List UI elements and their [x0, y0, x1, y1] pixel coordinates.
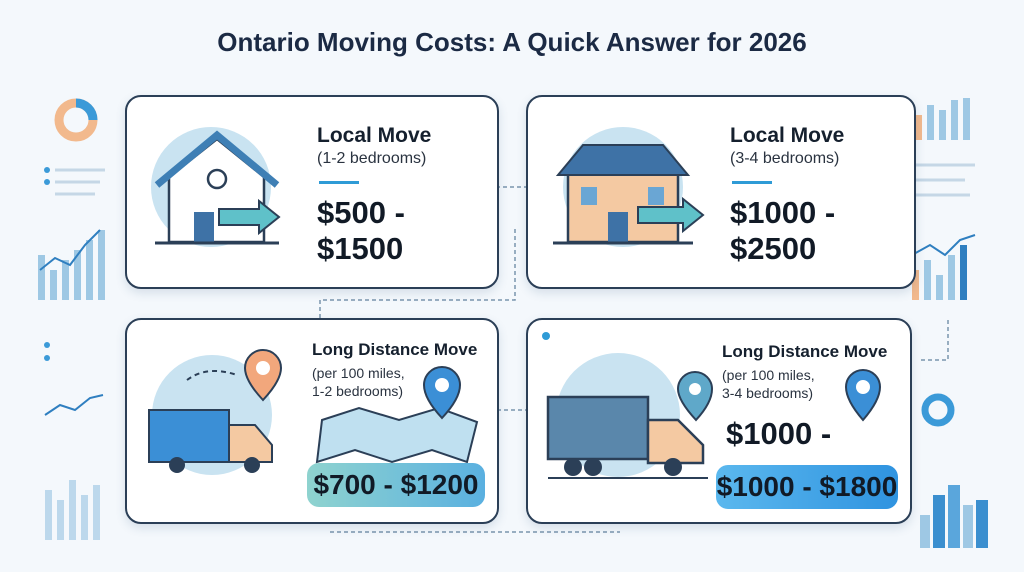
price pill — [716, 465, 898, 509]
price: $1000 - — [730, 195, 835, 230]
panel: long distance 1-2 bedrooms: Long Distance Move — [312, 340, 477, 359]
panel: long distance 3-4 bedrooms: 3-4 bedrooms) — [722, 385, 813, 401]
price pill: $700 - $1200 — [313, 469, 479, 500]
panel: long distance 1-2 bedrooms: (per 100 miles, — [312, 365, 405, 381]
price — [730, 195, 835, 266]
text: heading: Local Move — [317, 124, 431, 147]
icon: large truck — [546, 353, 713, 479]
icon: house — [151, 127, 280, 247]
panel: long distance 1-2 bedrooms — [125, 318, 499, 524]
panel: long distance 3-4 bedrooms — [526, 318, 912, 524]
price — [317, 195, 405, 266]
panel: local move 3-4 bedrooms — [526, 95, 916, 289]
panel: local move 3-4 bedrooms: (3-4 bedrooms) — [730, 150, 839, 167]
panel: local move 1-2 bedrooms — [125, 95, 499, 289]
panel: long distance 3-4 bedrooms: Long Distance Move — [722, 342, 887, 361]
price: $1000 - — [726, 416, 831, 451]
panel: local move 3-4 bedrooms: Local Move — [730, 124, 844, 147]
icon: truck and map — [148, 349, 478, 475]
price: $2500 — [730, 231, 816, 266]
title: Ontario Moving Costs: A Quick Answer for 2026 — [217, 27, 807, 57]
icon: pin — [845, 369, 881, 422]
panel: long distance 1-2 bedrooms: 1-2 bedrooms) — [312, 383, 403, 399]
panel: long distance 3-4 bedrooms: (per 100 miles, — [722, 367, 815, 383]
price: $1500 — [317, 231, 403, 266]
price pill: $1000 - $1800 — [717, 471, 897, 502]
price: $500 - — [317, 195, 405, 230]
panel: local move 1-2 bedrooms: (1-2 bedrooms) — [317, 150, 426, 167]
price pill — [307, 463, 485, 507]
icon: two-storey house — [553, 127, 704, 247]
